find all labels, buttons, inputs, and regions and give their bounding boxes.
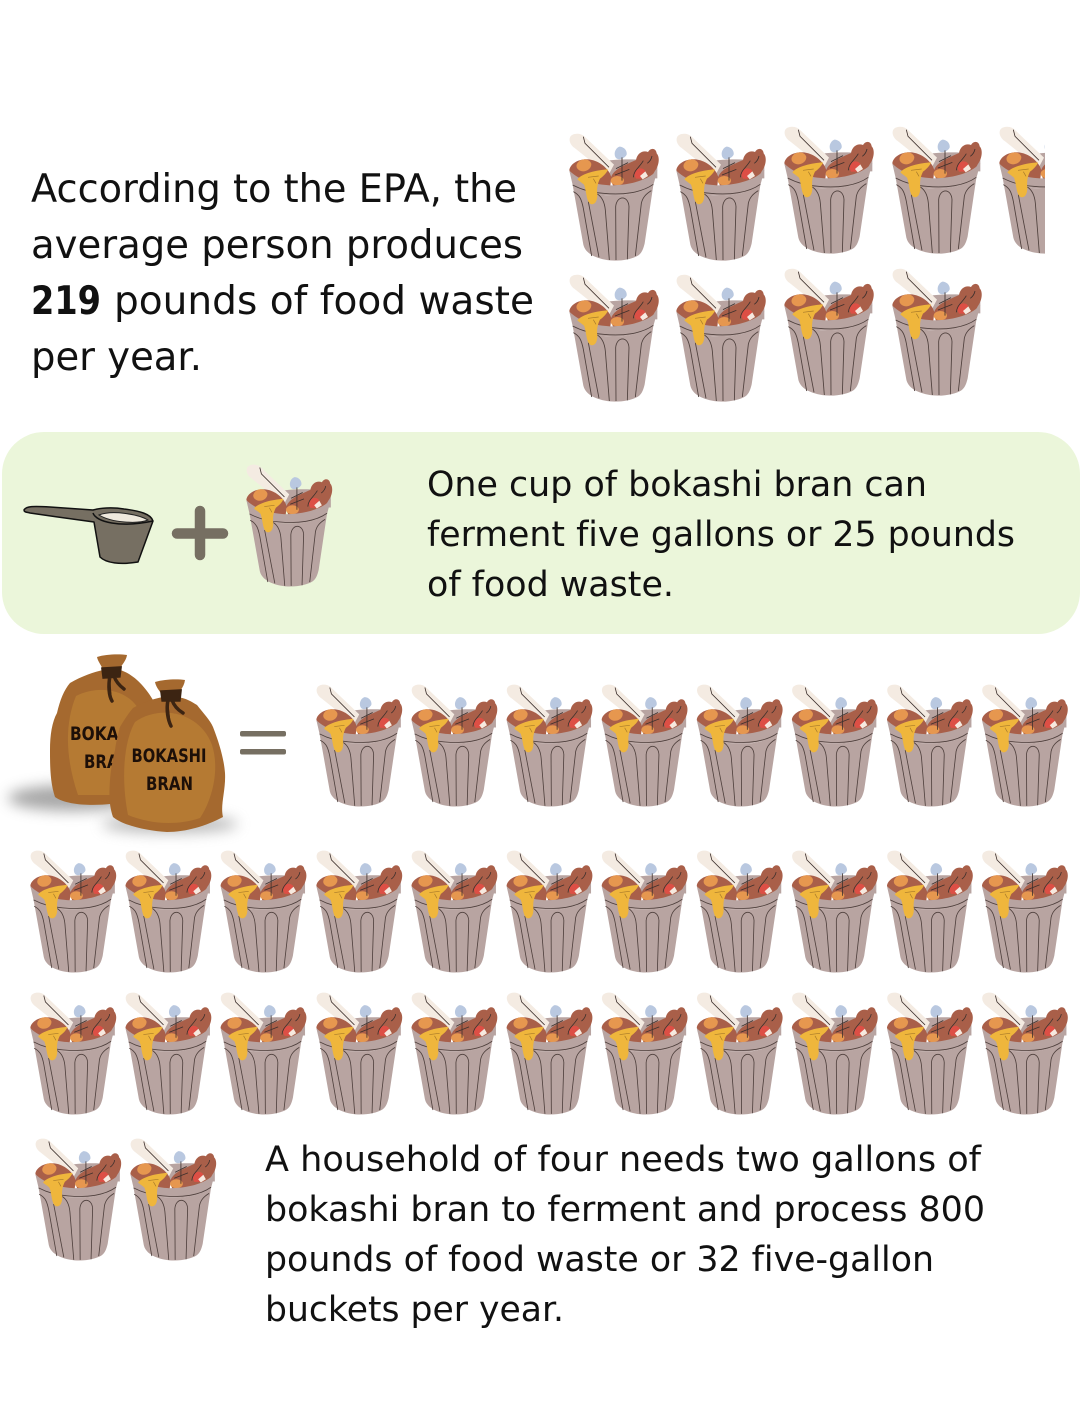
icon: plus sign	[177, 511, 223, 555]
icon row: eight buckets beside equals sign	[316, 685, 1068, 806]
back bag: BRAN	[84, 751, 131, 773]
text: household bran needs: pounds of food waste or 32 five-gallon	[265, 1240, 934, 1280]
bucket	[411, 851, 497, 972]
bucket	[784, 127, 874, 254]
bucket	[892, 269, 982, 396]
bucket	[30, 851, 116, 972]
front bag: BRAN	[146, 773, 193, 795]
bucket	[784, 269, 874, 396]
text: household bran needs: buckets per year.	[265, 1290, 564, 1330]
bucket	[316, 851, 402, 972]
icon: equals sign	[240, 731, 286, 754]
bucket	[569, 275, 659, 402]
bucket	[507, 993, 592, 1114]
bucket	[792, 851, 878, 972]
bucket	[221, 993, 306, 1114]
back bag: BOKASHI	[70, 723, 148, 745]
panel: bran per bucket	[2, 432, 1080, 634]
icon: two bags of bokashi bran	[8, 654, 238, 833]
icon: scoop of bran	[24, 506, 153, 563]
bucket	[507, 685, 592, 806]
icon row: eleven buckets	[30, 851, 1068, 972]
back bag	[50, 654, 153, 805]
bucket	[982, 851, 1068, 972]
text: household bran needs: bokashi bran to ferment and process 800	[265, 1190, 985, 1230]
bucket	[411, 993, 497, 1114]
bucket	[30, 993, 116, 1114]
text: EPA food waste statistic: per year.	[31, 335, 202, 380]
icon row: nine buckets representing 219 pounds	[569, 127, 1080, 402]
bucket	[569, 134, 659, 261]
bucket	[411, 685, 497, 806]
text: EPA food waste statistic: 219	[31, 279, 101, 324]
bucket	[887, 993, 973, 1114]
text: EPA food waste statistic: According to the EPA, the	[31, 167, 517, 212]
text: bran ratio: of food waste.	[427, 565, 674, 605]
text: household bran needs	[265, 1140, 985, 1330]
bucket	[982, 993, 1068, 1114]
bucket	[221, 851, 306, 972]
bucket	[316, 993, 402, 1114]
front bag: BOKASHI	[132, 745, 206, 767]
bucket	[316, 685, 402, 806]
bucket	[697, 685, 783, 806]
bucket	[697, 993, 783, 1114]
bucket	[676, 275, 766, 402]
bucket	[602, 851, 688, 972]
bucket	[130, 1139, 216, 1260]
text: household bran needs: A household of four needs two gallons of	[265, 1140, 982, 1180]
text: EPA food waste statistic: pounds of food waste	[114, 279, 534, 324]
bucket	[602, 685, 688, 806]
bucket	[35, 1139, 121, 1260]
partial bucket	[999, 126, 1045, 254]
text: bran ratio: One cup of bokashi bran can	[427, 465, 927, 505]
text: EPA food waste statistic	[31, 167, 534, 380]
icon: bucket	[246, 465, 332, 586]
bucket	[602, 993, 688, 1114]
bucket	[125, 993, 211, 1114]
bucket	[125, 851, 211, 972]
text: bran ratio	[427, 465, 1015, 605]
text: bran ratio: ferment five gallons or 25 pounds	[427, 515, 1015, 555]
icon row: eleven more buckets	[30, 993, 1068, 1114]
bucket	[697, 851, 783, 972]
text: EPA food waste statistic: average person produces	[31, 223, 523, 268]
bucket	[887, 851, 973, 972]
bucket	[982, 685, 1068, 806]
bucket	[676, 134, 766, 261]
bucket	[887, 685, 973, 806]
bucket	[792, 685, 878, 806]
front bag	[109, 679, 225, 832]
icon row: final two buckets	[35, 1139, 216, 1260]
bucket	[892, 127, 982, 254]
bucket	[507, 851, 592, 972]
bucket	[792, 993, 878, 1114]
